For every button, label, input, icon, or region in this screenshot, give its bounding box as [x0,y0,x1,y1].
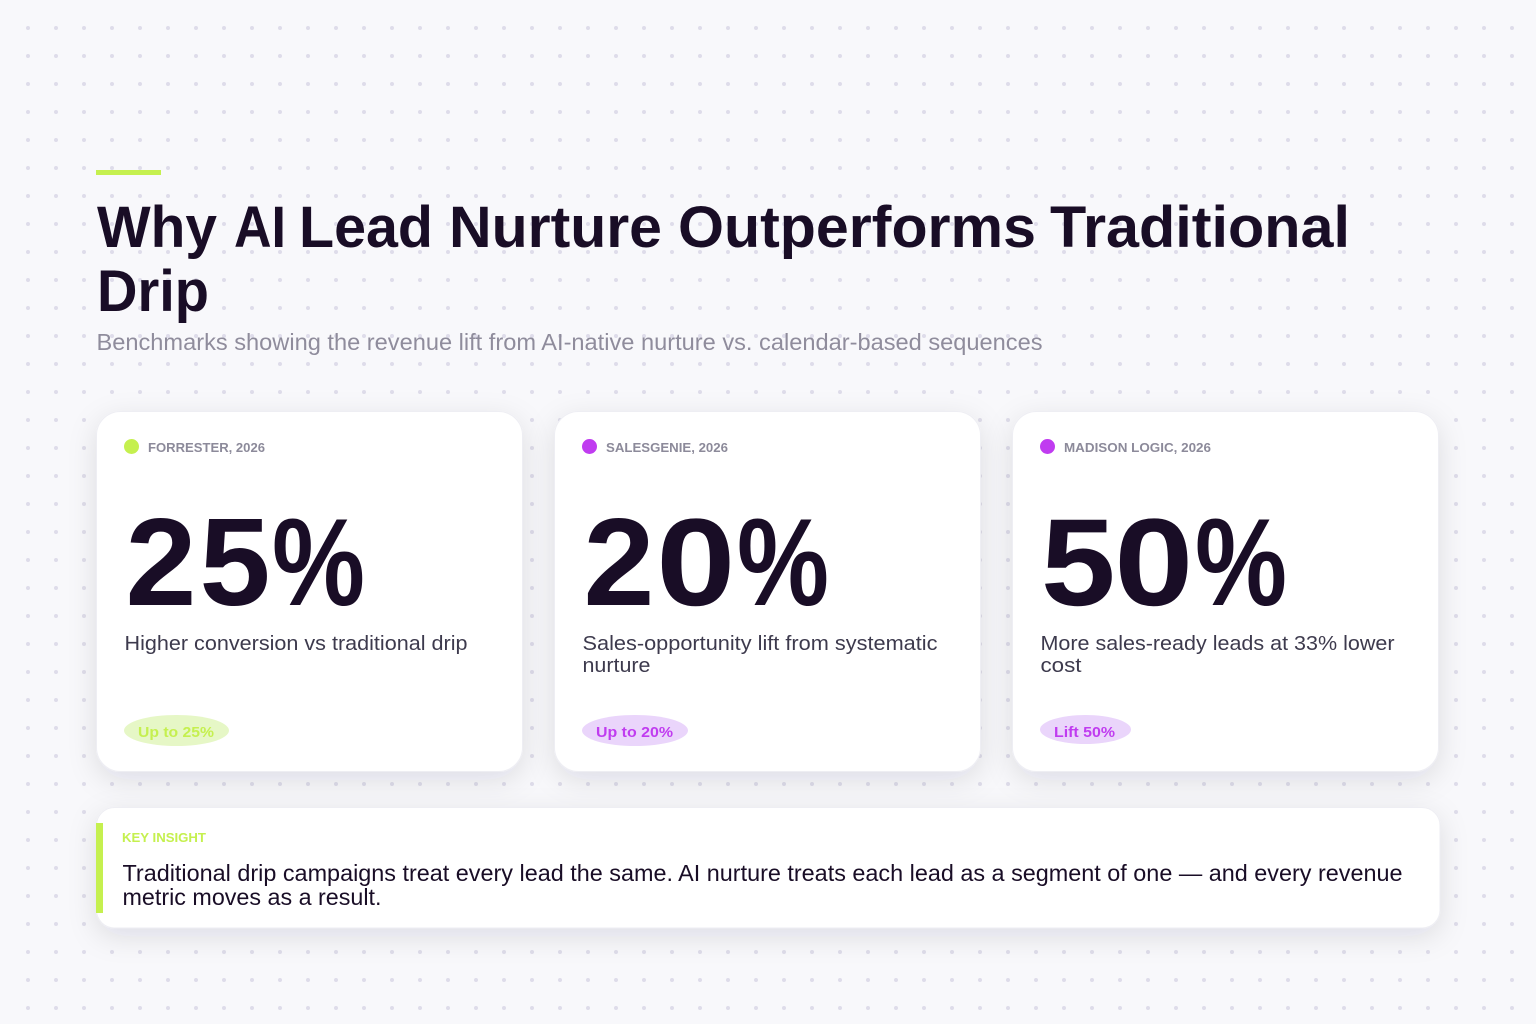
description: Sales-opportunity lift from systematic [582,633,938,655]
source dot [582,439,597,454]
big stat [126,494,365,632]
title: Outperforms [678,195,1036,260]
source label: FORRESTER, 2026 [148,440,265,455]
description: nurture [582,655,650,677]
big stat: 0 [1114,494,1193,632]
source dot [1040,439,1055,454]
pill badge: Lift 50% [1054,724,1115,741]
big stat [1041,494,1287,632]
big stat [584,494,829,632]
source dot [124,439,139,454]
accent bar [96,170,161,175]
source label: MADISON LOGIC, 2026 [1064,440,1211,455]
pill badge [124,715,229,746]
insight accent bar [96,823,103,913]
panel: Forrester card [96,412,522,772]
pill badge: Up to 25% [138,724,214,741]
pill badge [1040,715,1131,744]
big stat: 2 [126,494,196,632]
description [1040,633,1395,677]
big stat: 5 [200,494,270,632]
big stat: 5 [1041,494,1116,632]
insight text: Traditional drip campaigns treat every lead the same. AI nurture treats each lead as a segment of one — and every revenue [122,860,1402,886]
big stat: 2 [584,494,654,632]
pill badge [582,715,688,746]
big stat: 0 [656,494,735,632]
title: Drip [97,259,209,324]
description: cost [1040,655,1082,677]
big stat: % [272,494,365,632]
title: Lead [299,195,433,260]
insight label: KEY INSIGHT [122,830,206,845]
description [582,633,938,677]
big stat: % [737,494,829,632]
big stat: % [1195,494,1287,632]
title: Why [97,195,217,260]
description: Higher conversion vs traditional drip [124,633,467,655]
title [97,195,1350,324]
title: AI [234,195,286,260]
insight text [122,860,1402,910]
subtitle: Benchmarks showing the revenue lift from AI-native nurture vs. calendar-based sequences [96,329,1042,355]
title: Traditional [1050,195,1350,260]
description: More sales-ready leads at 33% lower [1040,633,1395,655]
panel: SalesGenie card [554,412,980,772]
panel: Madison Logic card [1012,412,1438,772]
title: Nurture [449,195,662,260]
panel: key insight [96,808,1440,928]
insight text: metric moves as a result. [122,884,382,910]
source label: SALESGENIE, 2026 [606,440,728,455]
pill badge: Up to 20% [596,724,673,741]
